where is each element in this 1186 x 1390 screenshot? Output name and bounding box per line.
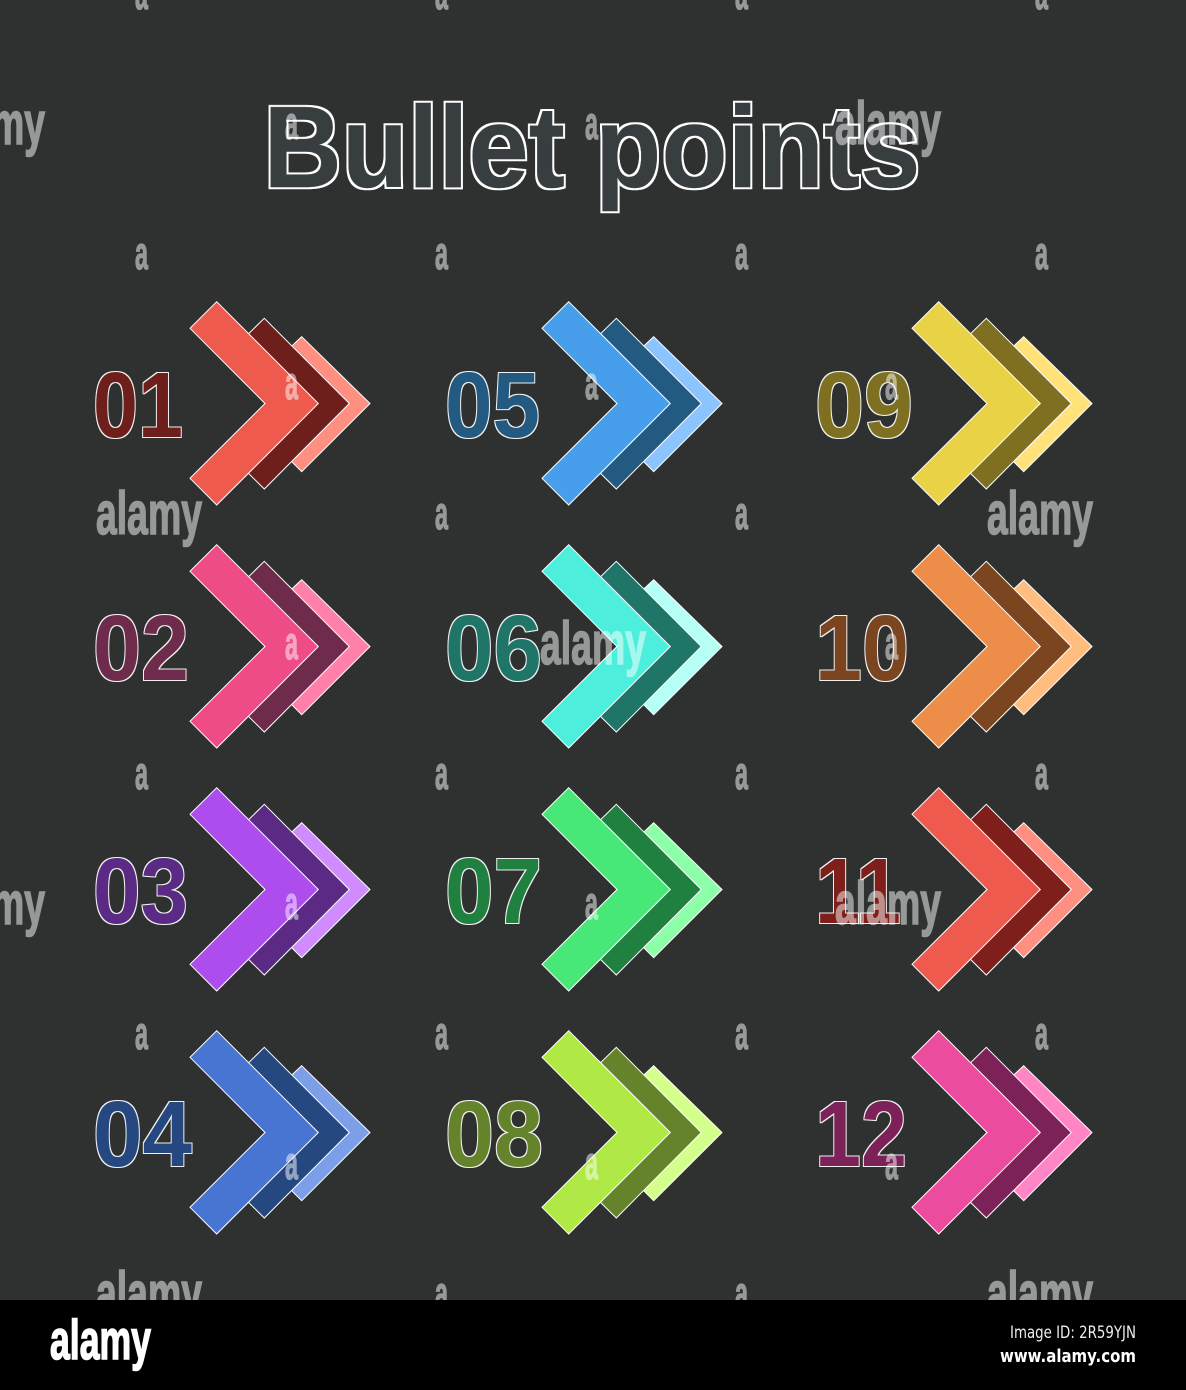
watermark pattern: a	[435, 1007, 448, 1059]
bullet 02	[93, 545, 370, 748]
watermark pattern: alamy	[540, 610, 646, 677]
watermark pattern: a	[285, 357, 298, 409]
watermark pattern: a	[735, 1267, 748, 1319]
number 11: 11	[815, 839, 901, 943]
chevron 01 middle	[237, 318, 349, 489]
bullet 11	[815, 788, 1092, 991]
watermark pattern: a	[735, 227, 748, 279]
watermark pattern: a	[135, 227, 148, 279]
watermark pattern: a	[585, 877, 598, 929]
number 03: 03	[93, 839, 188, 943]
chevron 10 back	[1002, 580, 1092, 715]
chevron 10 middle	[959, 561, 1071, 732]
number 10: 10	[815, 596, 909, 700]
chevron 05 middle	[589, 318, 701, 489]
watermark pattern: a	[285, 877, 298, 929]
chevron 07 back	[632, 823, 722, 958]
watermark pattern: a	[435, 747, 448, 799]
chevron 11 front	[912, 788, 1040, 991]
chevron 04 middle	[237, 1047, 349, 1218]
number 09: 09	[815, 353, 913, 457]
chevron 12 middle	[959, 1047, 1071, 1218]
watermark pattern: a	[135, 747, 148, 799]
number 01: 01	[93, 353, 183, 457]
chevron 07 middle	[589, 804, 701, 975]
chevron 04 front	[190, 1031, 318, 1234]
watermark pattern: a	[735, 1007, 748, 1059]
bullet 01	[93, 302, 370, 505]
watermark pattern: a	[135, 1007, 148, 1059]
watermark pattern: alamy	[987, 1260, 1093, 1327]
bullet 08	[445, 1031, 722, 1234]
chevron 02 back	[280, 580, 370, 715]
bullet 03	[93, 788, 370, 991]
footer logo: alamy	[50, 1308, 151, 1371]
chevron 11 back	[1002, 823, 1092, 958]
watermark pattern: a	[1035, 747, 1048, 799]
website: www.alamy.com	[1000, 1346, 1136, 1367]
watermark pattern: a	[285, 97, 298, 149]
chevron 02 front	[190, 545, 318, 748]
chevron 02 middle	[237, 561, 349, 732]
watermark pattern: alamy	[835, 90, 941, 157]
watermark pattern: a	[735, 487, 748, 539]
watermark pattern: a	[885, 1137, 898, 1189]
number 12: 12	[815, 1082, 907, 1186]
number 04: 04	[93, 1082, 192, 1186]
chevron 10 front	[912, 545, 1040, 748]
watermark pattern: a	[435, 487, 448, 539]
image id: Image ID: 2R59YJN	[1010, 1323, 1136, 1343]
chevron 12 back	[1002, 1066, 1092, 1201]
watermark pattern: alamy	[96, 1260, 202, 1327]
chevron 06 front	[542, 545, 670, 748]
number 06: 06	[445, 596, 542, 700]
chevron 04 back	[280, 1066, 370, 1201]
watermark pattern: a	[735, 747, 748, 799]
chevron 06 back	[632, 580, 722, 715]
chevron 06 middle	[589, 561, 701, 732]
watermark pattern: a	[435, 1267, 448, 1319]
watermark pattern: alamy	[987, 480, 1093, 547]
chevron 11 middle	[959, 804, 1071, 975]
chevron 01 front	[190, 302, 318, 505]
number 07: 07	[445, 839, 542, 943]
title: Bullet points	[264, 83, 920, 212]
chevron 09 middle	[959, 318, 1071, 489]
chevron 09 back	[1002, 337, 1092, 472]
watermark pattern: a	[1035, 227, 1048, 279]
watermark pattern: a	[585, 1137, 598, 1189]
watermark pattern: a	[585, 357, 598, 409]
bullet 07	[445, 788, 722, 991]
chevron 08 front	[542, 1031, 670, 1234]
chevron 05 back	[632, 337, 722, 472]
watermark pattern: a	[885, 617, 898, 669]
chevron 12 front	[912, 1031, 1040, 1234]
watermark pattern: a	[585, 97, 598, 149]
watermark pattern: alamy	[96, 480, 202, 547]
bullet 09	[815, 302, 1092, 505]
bullet 04	[93, 1031, 370, 1234]
bullet 06	[445, 545, 722, 748]
chevron 05 front	[542, 302, 670, 505]
watermark pattern: alamy	[835, 870, 941, 937]
bullet 05	[445, 302, 722, 505]
watermark pattern: a	[285, 617, 298, 669]
watermark pattern: a	[285, 1137, 298, 1189]
bullet 10	[815, 545, 1092, 748]
number 02: 02	[93, 596, 189, 700]
watermark pattern: a	[885, 357, 898, 409]
watermark pattern: a	[1035, 1007, 1048, 1059]
chevron 07 front	[542, 788, 670, 991]
footer bar	[0, 1300, 1186, 1390]
number 08: 08	[445, 1082, 543, 1186]
chevron 03 front	[190, 788, 318, 991]
chevron 09 front	[912, 302, 1040, 505]
number 05: 05	[445, 353, 540, 457]
chevron 01 back	[280, 337, 370, 472]
chevron 08 back	[632, 1066, 722, 1201]
watermark pattern: a	[435, 227, 448, 279]
chevron 03 back	[280, 823, 370, 958]
bullet 12	[815, 1031, 1092, 1234]
chevron 08 middle	[589, 1047, 701, 1218]
chevron 03 middle	[237, 804, 349, 975]
